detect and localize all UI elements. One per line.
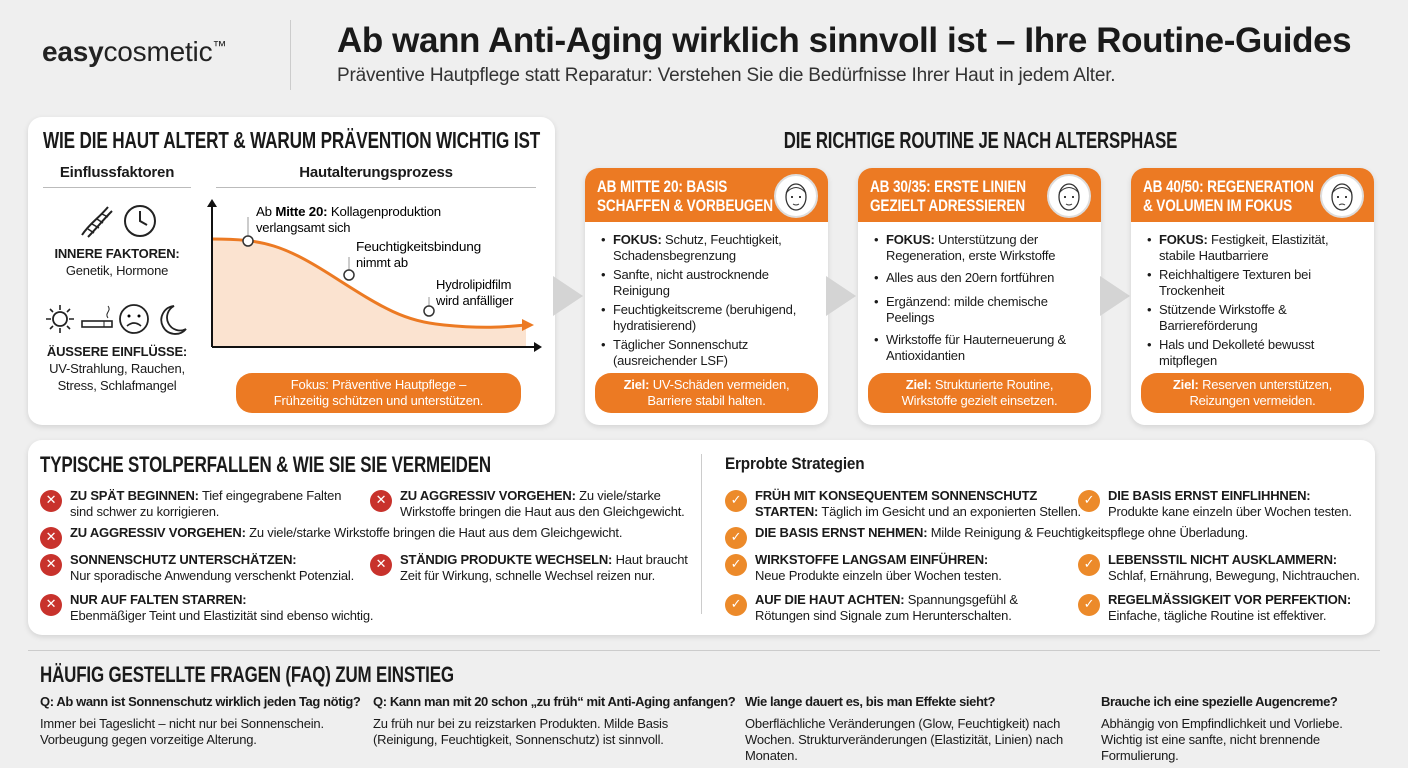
panel: age 30: Ergänzend: milde chemische Peelings <box>886 294 1048 325</box>
panel: pitfalls and strategies: FRÜH MIT KONSEQUENTEM SONNENSCHUTZ STARTEN: Täglich im Gesicht und an exponierten Stellen. <box>755 488 1081 519</box>
heading: faq: HÄUFIG GESTELLTE FRAGEN (FAQ) ZUM EINSTIEG <box>40 662 454 687</box>
heading: pitfalls: TYPISCHE STOLPERFALLEN & WIE SIE SIE VERMEIDEN <box>40 452 491 477</box>
panel: pitfalls and strategies: ZU AGGRESSIV VORGEHEN: Zu viele/starke Wirkstoffe bringen die Haut aus den Gleichgewicht. <box>400 488 685 519</box>
arrow <box>826 276 856 316</box>
logo: easycosmetic™ <box>42 36 226 67</box>
subheading: process <box>216 164 536 188</box>
subheading: process: Hautalterungsprozess <box>299 164 453 181</box>
panel: age 40: FOKUS: Festigkeit, Elastizität, stabile Hautbarriere <box>1159 232 1328 263</box>
subtitle: Präventive Hautpflege statt Reparatur: Verstehen Sie die Bedürfnisse Ihrer Haut in jedem Alter. <box>337 65 1115 86</box>
panel: pitfalls and strategies: Nur sporadische Anwendung verschenkt Potenzial. <box>70 568 354 583</box>
chart: aging curve: nimmt ab <box>356 255 408 270</box>
panel: pitfalls and strategies: ✕ <box>46 530 56 545</box>
callout: focus: Fokus: Präventive Hautpflege – <box>291 377 466 392</box>
faq 3: Wie lange dauert es, bis man Effekte sieht? <box>745 694 995 709</box>
panel: pitfalls and strategies: ✓ <box>731 493 741 508</box>
chart: aging curve: Feuchtigkeitsbindung <box>356 239 481 254</box>
panel: pitfalls and strategies: ZU SPÄT BEGINNEN: Tief eingegrabene Falten sind schwer zu korrigieren. <box>70 488 341 519</box>
faq 1: Immer bei Tageslicht – nicht nur bei Sonnenschein. Vorbeugung gegen vorzeitige Alterung. <box>40 716 324 747</box>
panel: age 20 <box>585 168 828 425</box>
text: inner factors: Genetik, Hormone <box>66 263 168 278</box>
panel: pitfalls and strategies: ✕ <box>46 493 56 508</box>
chart: aging curve: Ab Mitte 20: Kollagenproduktion <box>256 204 441 219</box>
panel: age 40: Reizungen vermeiden. <box>1189 393 1316 408</box>
panel: pitfalls and strategies: ✓ <box>1084 597 1094 612</box>
faq 2: Zu früh nur bei zu reizstarken Produkten. Milde Basis (Reinigung, Feuchtigkeit, Sonnenschutz) ist sinnvoll. <box>373 716 668 747</box>
panel: pitfalls and strategies: Neue Produkte einzeln über Wochen testen. <box>755 568 1002 583</box>
heading: routine: DIE RICHTIGE ROUTINE JE NACH ALTERSPHASE <box>783 127 1177 153</box>
text: outer factors: Stress, Schlafmangel <box>58 378 176 393</box>
faq 4: Brauche ich eine spezielle Augencreme? <box>1101 694 1337 709</box>
panel: age 40: Stützende Wirkstoffe & Barriereförderung <box>1159 302 1287 333</box>
panel: pitfalls and strategies: WIRKSTOFFE LANGSAM EINFÜHREN: <box>755 552 988 567</box>
panel: pitfalls and strategies: STÄNDIG PRODUKTE WECHSELN: Haut braucht Zeit für Wirkung, schnelle Wechsel reizen nur. <box>400 552 688 583</box>
chart: aging curve: verlangsamt sich <box>256 220 350 235</box>
panel: pitfalls and strategies: ✓ <box>731 530 741 545</box>
panel: pitfalls and strategies: ✓ <box>731 597 741 612</box>
panel: pitfalls and strategies: ZU AGGRESSIV VORGEHEN: Zu viele/starke Wirkstoffe bringen die Haut aus dem Gleichgewicht. <box>70 525 622 540</box>
panel: pitfalls and strategies: DIE BASIS ERNST NEHMEN: Milde Reinigung & Feuchtigkeitspflege ohne Überladung. <box>755 525 1248 540</box>
panel: age 20: Ziel: UV-Schäden vermeiden, <box>624 377 789 392</box>
panel: pitfalls and strategies: SONNENSCHUTZ UNTERSCHÄTZEN: <box>70 552 296 567</box>
faq 2 <box>373 694 735 747</box>
panel: pitfalls and strategies: ✕ <box>376 493 386 508</box>
arrow <box>553 276 583 316</box>
panel: pitfalls and strategies: ✕ <box>46 597 56 612</box>
heading: WIE DIE HAUT ALTERT & WARUM PRÄVENTION WICHTIG IST <box>43 127 540 153</box>
panel: age 20: Sanfte, nicht austrocknende Reinigung <box>613 267 769 298</box>
panel: age 40: Ziel: Reserven unterstützen, <box>1173 377 1332 392</box>
panel: pitfalls and strategies: AUF DIE HAUT ACHTEN: Spannungsgefühl & Rötungen sind Signale zum Herunterschalten. <box>755 592 1018 623</box>
chart: aging curve: Hydrolipidfilm <box>436 277 511 292</box>
panel: age 20: SCHAFFEN & VORBEUGEN <box>597 196 773 215</box>
panel: pitfalls and strategies: REGELMÄSSIGKEIT VOR PERFEKTION: <box>1108 592 1351 607</box>
panel: age 20: FOKUS: Schutz, Feuchtigkeit, Schadensbegrenzung <box>613 232 782 263</box>
panel: age 30: Ziel: Strukturierte Routine, <box>906 377 1053 392</box>
panel: pitfalls and strategies: Schlaf, Ernährung, Bewegung, Nichtrauchen. <box>1108 568 1360 583</box>
panel: pitfalls and strategies: ✓ <box>1084 493 1094 508</box>
panel: age 20: Barriere stabil halten. <box>647 393 766 408</box>
panel: age 30 <box>858 168 1101 425</box>
panel: age 30: Wirkstoffe gezielt einsetzen. <box>902 393 1057 408</box>
faq 2: Q: Kann man mit 20 schon „zu früh“ mit Anti-Aging anfangen? <box>373 694 735 709</box>
panel: pitfalls and strategies: ✕ <box>376 557 386 572</box>
panel: pitfalls and strategies: ✓ <box>1084 557 1094 572</box>
faq 3: Oberflächliche Veränderungen (Glow, Feuchtigkeit) nach Wochen. Strukturveränderungen (Elastizität, Linien) nach Monaten. <box>745 716 1063 763</box>
panel: age 30: FOKUS: Unterstützung der Regeneration, erste Wirkstoffe <box>886 232 1055 263</box>
text: outer factors: ÄUSSERE EINFLÜSSE: <box>47 344 187 359</box>
panel: pitfalls and strategies <box>28 440 1375 635</box>
panel: pitfalls and strategies: LEBENSSTIL NICHT AUSKLAMMERN: <box>1108 552 1337 567</box>
panel: age 30: GEZIELT ADRESSIEREN <box>870 196 1025 215</box>
panel: age 30: Wirkstoffe für Hauterneuerung & Antioxidantien <box>886 332 1066 363</box>
panel: age 40: Reichhaltigere Texturen bei Trockenheit <box>1159 267 1311 298</box>
panel: how skin ages <box>28 117 555 425</box>
panel: pitfalls and strategies: ✓ <box>731 557 741 572</box>
panel: age 30: AB 30/35: ERSTE LINIEN <box>870 177 1026 196</box>
callout: focus <box>236 373 521 413</box>
faq 3 <box>745 694 1063 763</box>
faq 1 <box>40 694 360 747</box>
panel: age 40 <box>1131 168 1374 425</box>
title: Ab wann Anti-Aging wirklich sinnvoll ist – Ihre Routine-Guides <box>337 21 1351 60</box>
text: outer factors: UV-Strahlung, Rauchen, <box>49 361 185 376</box>
heading: strategies: Erprobte Strategien <box>725 454 864 473</box>
panel: age 40: Hals und Dekolleté bewusst mitpflegen <box>1159 337 1314 368</box>
faq 1: Q: Ab wann ist Sonnenschutz wirklich jeden Tag nötig? <box>40 694 360 709</box>
text: inner factors: INNERE FAKTOREN: <box>54 246 180 261</box>
panel: pitfalls and strategies: ✕ <box>46 557 56 572</box>
panel: age 20: Feuchtigkeitscreme (beruhigend, hydratisierend) <box>613 302 796 333</box>
text: inner factors <box>54 246 180 278</box>
chart: aging curve <box>207 199 542 352</box>
panel: age 20: Täglicher Sonnenschutz (ausreichender LSF) <box>613 337 748 368</box>
panel: pitfalls and strategies: Ebenmäßiger Teint und Elastizität sind ebenso wichtig. <box>70 608 373 623</box>
text: outer factors <box>47 344 187 393</box>
panel: pitfalls and strategies: Einfache, tägliche Routine ist effektiver. <box>1108 608 1326 623</box>
faq 4: Abhängig von Empfindlichkeit und Vorliebe. Wichtig ist eine sanfte, nicht brennende Formulierung. <box>1101 716 1343 763</box>
icons: inner <box>81 205 156 238</box>
panel: pitfalls and strategies: DIE BASIS ERNST EINFLIHHNEN: <box>1108 488 1310 503</box>
subheading: factors: Einflussfaktoren <box>60 164 174 181</box>
chart: aging curve: wird anfälliger <box>435 293 514 308</box>
faq 4 <box>1101 694 1343 763</box>
panel: pitfalls and strategies: Produkte kane einzeln über Wochen testen. <box>1108 504 1352 519</box>
callout: focus: Frühzeitig schützen und unterstützen. <box>274 393 483 408</box>
arrow <box>1100 276 1130 316</box>
panel: age 40: & VOLUMEN IM FOKUS <box>1143 196 1292 215</box>
panel: pitfalls and strategies: NUR AUF FALTEN STARREN: <box>70 592 246 607</box>
panel: age 30: Alles aus den 20ern fortführen <box>886 270 1054 285</box>
panel: age 40: AB 40/50: REGENERATION <box>1143 177 1314 196</box>
panel: age 20: AB MITTE 20: BASIS <box>597 177 727 196</box>
subheading: factors <box>43 164 191 188</box>
icons: outer <box>46 304 187 335</box>
